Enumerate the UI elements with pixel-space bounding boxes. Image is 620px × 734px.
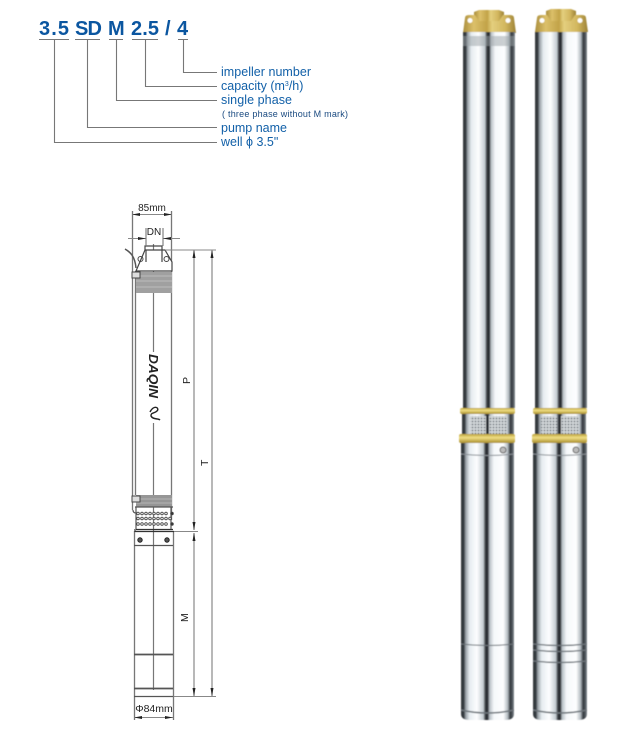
dimension arrowheads	[132, 213, 214, 719]
model code labels: 3	[285, 81, 289, 88]
brand logo: DAQIN	[146, 354, 160, 399]
strainer section	[462, 412, 514, 436]
dimension lines	[128, 214, 216, 718]
model code labels: ( three phase without M mark)	[222, 109, 348, 119]
dimension labels: M	[179, 613, 191, 622]
model code labels	[220, 65, 348, 149]
pump upper body	[535, 32, 587, 408]
model code heading: 4	[177, 18, 189, 40]
dimension labels: Φ84mm	[135, 703, 173, 715]
dimension labels	[135, 203, 211, 715]
model code labels: capacity (m	[221, 79, 285, 93]
dimension labels: DN	[147, 227, 161, 238]
model code heading	[39, 18, 189, 40]
model code heading: SD	[75, 18, 102, 40]
pump motor	[533, 443, 587, 720]
brass rings	[459, 408, 515, 443]
model code connector lines	[39, 40, 217, 142]
dimension labels: 85mm	[138, 203, 166, 214]
brand logo	[146, 354, 160, 420]
brass head	[535, 9, 588, 32]
model code labels: pump name	[221, 121, 287, 135]
strainer holes	[137, 512, 173, 525]
dimension labels: T	[199, 459, 211, 466]
strainer section	[535, 412, 586, 436]
model code labels: well ϕ 3.5"	[220, 135, 278, 149]
model code heading: M	[108, 18, 125, 40]
model code labels: impeller number	[221, 65, 311, 79]
model code heading: 3.5	[39, 18, 69, 40]
pump photo right	[532, 9, 588, 720]
pump motor	[461, 443, 514, 720]
model code labels: /h)	[289, 79, 303, 93]
dimension labels: P	[181, 377, 193, 384]
pump photo left	[459, 10, 516, 720]
model code heading: /	[165, 18, 171, 40]
technical drawing of pump	[125, 203, 216, 720]
pump upper body	[463, 32, 515, 408]
brass head	[463, 10, 516, 33]
model code labels: single phase	[221, 93, 292, 107]
pump outline	[125, 211, 174, 720]
model code heading: 2.5	[131, 18, 159, 40]
brass rings	[532, 408, 587, 443]
